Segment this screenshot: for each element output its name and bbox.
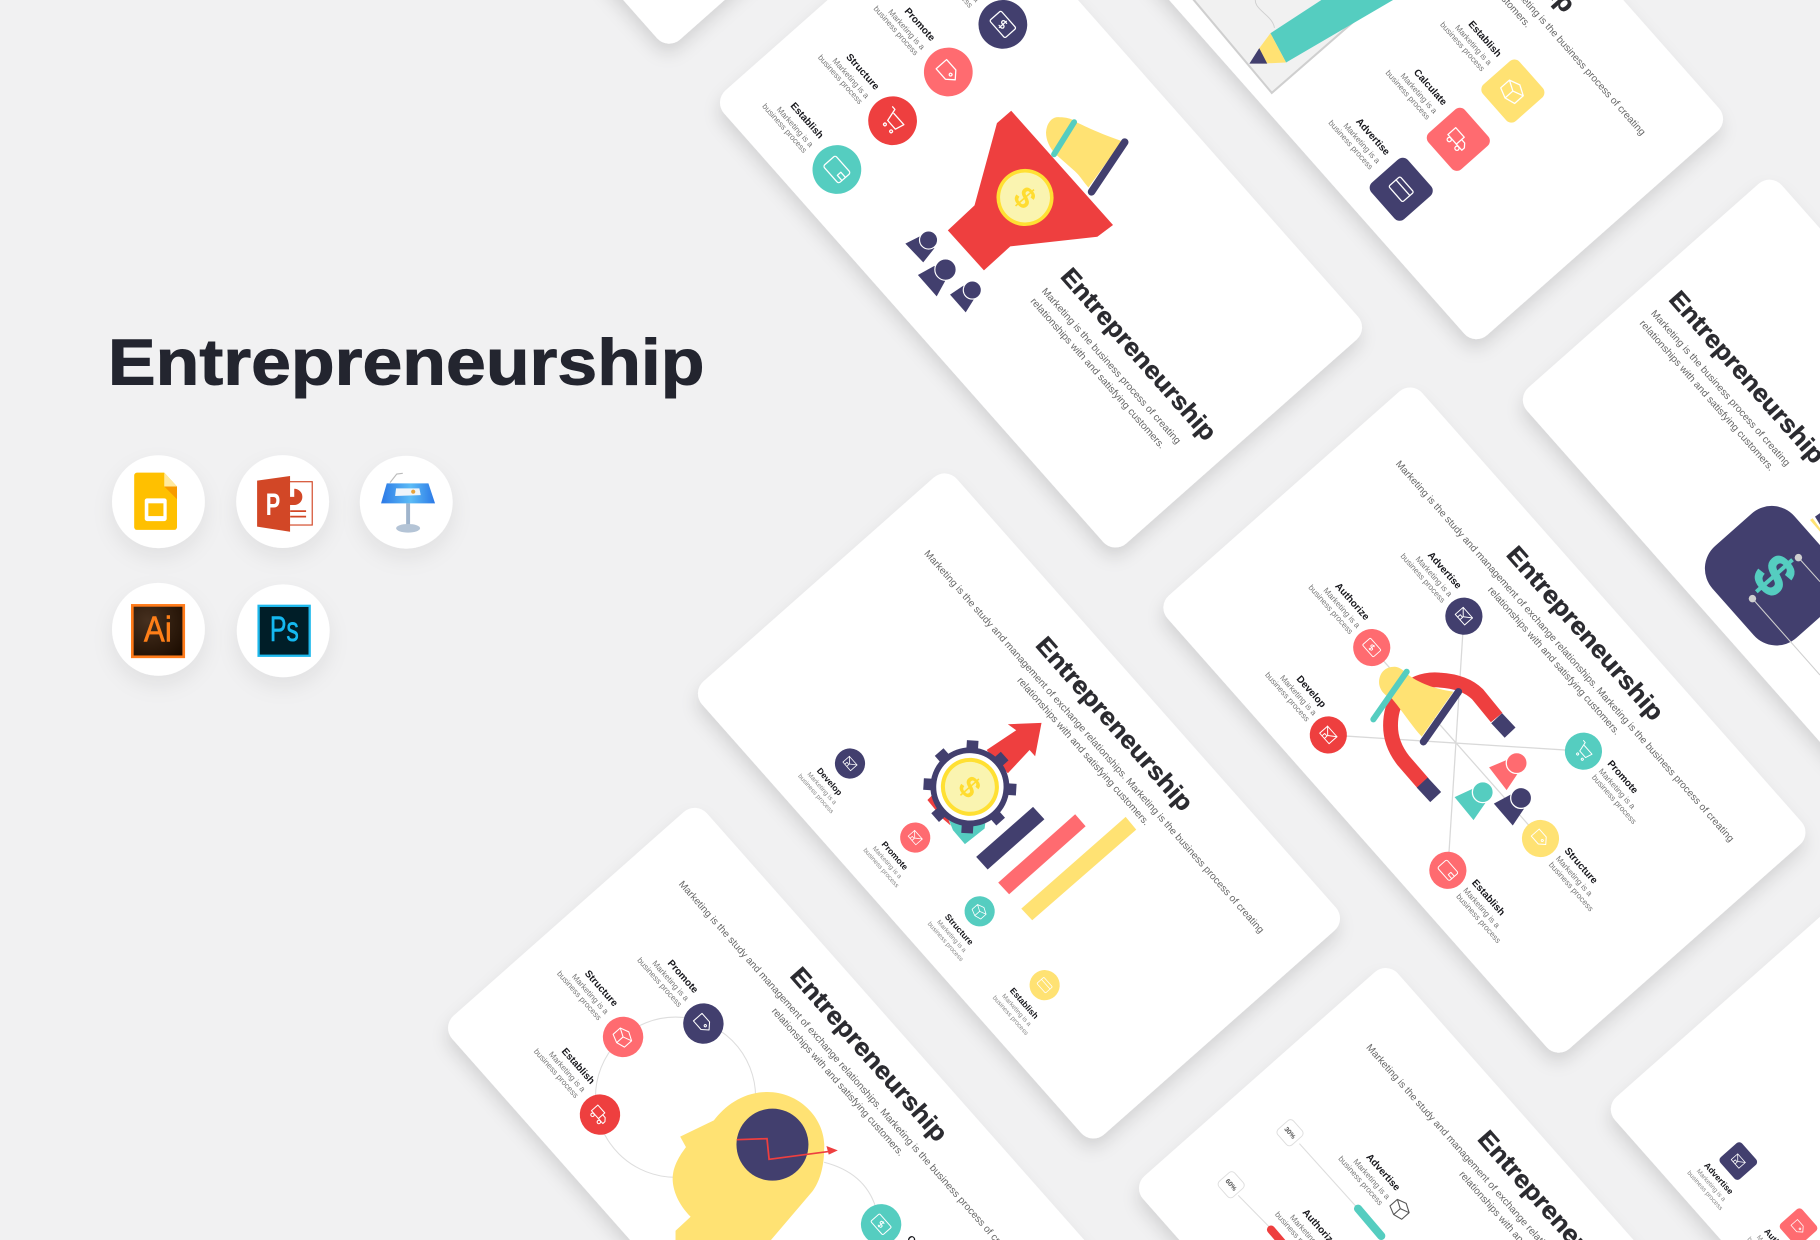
item: Promote: Promote xyxy=(665,958,700,996)
slide heading: relationships with and satisfying customers. xyxy=(1637,318,1776,473)
item: Advertise xyxy=(1392,537,1492,642)
panel: magnet slide xyxy=(1157,381,1812,1059)
gear: $ xyxy=(951,770,987,805)
item: Establish xyxy=(1422,844,1520,948)
coin: $ xyxy=(1006,181,1042,216)
item: Develop xyxy=(796,735,878,816)
item: Advertise: Advertise xyxy=(1364,1152,1402,1194)
item: Promote xyxy=(1557,725,1655,829)
item: Promote xyxy=(628,941,732,1052)
item: Structure: business process xyxy=(816,53,864,106)
item: Calculate: business process xyxy=(1384,69,1432,121)
item: Advertise: Marketing is a xyxy=(1351,1157,1392,1201)
item: Establish: Marketing is a xyxy=(775,105,815,149)
item: Calculate: Calculate xyxy=(1411,67,1449,108)
title: Entrepreneurship xyxy=(108,325,705,398)
people xyxy=(905,231,981,312)
item: Promote xyxy=(861,809,944,890)
slide heading: Entrepreneurship xyxy=(1501,541,1669,726)
megaphone xyxy=(1046,117,1125,192)
item: Advertise: Advertise xyxy=(1702,1160,1736,1196)
slide heading xyxy=(1637,285,1820,492)
panel: money slide xyxy=(1516,173,1820,851)
panel: cropped slide top left xyxy=(267,0,922,50)
item: Structure: Marketing is a xyxy=(831,56,871,101)
item: Structure: business process xyxy=(1547,860,1595,913)
item: Advertise xyxy=(1318,100,1436,224)
icon: Photoshop xyxy=(237,584,330,677)
slide heading: relationships with and satisfying customers. xyxy=(1485,585,1622,737)
item: Calculate xyxy=(1375,50,1493,174)
arrow behind gear xyxy=(927,790,951,826)
item: Promote: Marketing is a xyxy=(871,845,903,881)
progress line 30% xyxy=(1275,1118,1381,1236)
item: Develop: Develop xyxy=(1294,674,1328,710)
item: Structure: Marketing is a xyxy=(935,919,967,954)
item: Calculate: Marketing is a xyxy=(1399,72,1439,116)
magnet xyxy=(1391,680,1510,797)
item: Promote: Promote xyxy=(1605,759,1640,796)
slide heading: Marketing is the business process of creating xyxy=(1648,308,1792,469)
item: Advertise: Marketing is a xyxy=(1414,555,1454,599)
panel: head slide xyxy=(441,801,1097,1240)
coin xyxy=(985,157,1065,238)
progress line 60% xyxy=(1216,1170,1306,1240)
item: Structure: Structure xyxy=(943,912,976,947)
slide heading xyxy=(1028,262,1221,470)
icon: Keynote xyxy=(360,456,453,549)
item: Promote: Marketing is a xyxy=(1597,767,1637,811)
item: Authorize: Authorize xyxy=(1332,581,1371,623)
megaphone xyxy=(1373,667,1458,742)
brain circle xyxy=(736,1109,808,1181)
slide heading: Marketing is the business process of creating xyxy=(1039,286,1183,447)
progress line 60%: 60% xyxy=(1223,1178,1238,1193)
item: Promote: business process xyxy=(635,956,684,1009)
paper sheet xyxy=(1191,0,1364,93)
slide heading: Entrepreneurship xyxy=(1030,632,1198,817)
icon: box xyxy=(1388,1197,1412,1221)
item: Establish: Establish xyxy=(788,101,825,141)
item: Develop: business process xyxy=(796,773,835,816)
item: Authorize xyxy=(1746,1199,1820,1240)
panel: funnel slide xyxy=(713,0,1369,554)
slide heading: relationships with and satisfying customers. xyxy=(1015,676,1151,828)
item: Establish: business process xyxy=(1454,892,1503,945)
item: Establish: business process xyxy=(991,995,1030,1037)
gear xyxy=(904,721,1035,852)
item: Establish: Marketing is a xyxy=(1461,886,1502,930)
panel: diamond slide xyxy=(1604,882,1820,1240)
item: Calculate xyxy=(853,1196,956,1240)
item: Structure xyxy=(1514,812,1613,917)
item: Promote: business process xyxy=(861,847,900,890)
item: Establish: Establish xyxy=(1469,878,1507,918)
connector lines xyxy=(1328,616,1583,870)
item: Advertise xyxy=(1685,1133,1766,1213)
item: Promote: business process xyxy=(1590,773,1638,826)
item: Structure: Structure xyxy=(843,52,881,93)
slide heading: Entrepreneurship xyxy=(1055,263,1221,446)
item: Authorize xyxy=(1273,1195,1339,1240)
icon: PowerPoint: P xyxy=(266,487,280,522)
ring connector xyxy=(595,1017,756,1177)
item: Promote: business process xyxy=(872,4,920,57)
slide heading: Entrepreneurship xyxy=(784,962,952,1147)
item: Establish xyxy=(991,956,1073,1037)
head xyxy=(673,1092,824,1240)
item: Establish: business process xyxy=(1438,20,1486,73)
icon: Google Slides xyxy=(112,455,205,548)
item: Promote: Promote xyxy=(902,6,937,44)
icon: Photoshop: Ps xyxy=(270,610,299,649)
money bag: $ xyxy=(1739,542,1810,609)
item: Promote xyxy=(866,0,983,106)
item: Promote: Promote xyxy=(880,839,910,872)
panel: progress slide xyxy=(1132,961,1788,1240)
item: Establish: business process xyxy=(532,1047,580,1100)
item: Advertise: Marketing is a xyxy=(1342,121,1382,166)
progress line 30%: 30% xyxy=(1282,1126,1296,1141)
item: Promote: Marketing is a xyxy=(886,8,927,52)
icon: PowerPoint xyxy=(236,455,329,548)
item: Establish: Marketing is a xyxy=(547,1050,587,1094)
item: Structure: business process xyxy=(926,921,965,964)
item: Establish: Establish xyxy=(1466,19,1503,60)
growth arrow xyxy=(987,723,1042,773)
item: Structure xyxy=(810,32,927,155)
item: Advertise: business process xyxy=(1685,1170,1724,1213)
money bag xyxy=(1692,493,1820,675)
item: Advertise: Advertise xyxy=(1353,116,1392,158)
funnel xyxy=(948,111,1113,270)
item: Structure: Structure xyxy=(1562,846,1600,887)
item: Establish: Establish xyxy=(559,1046,597,1087)
item: Establish: Marketing is a xyxy=(1453,23,1494,67)
slide heading: Entrepreneurship xyxy=(1663,286,1820,469)
icon: Illustrator: Ai xyxy=(144,609,172,650)
item: Authorize: Marketing is a xyxy=(1322,586,1362,630)
item: Promote: Marketing is a xyxy=(650,959,691,1003)
item: Develop: Marketing is a xyxy=(806,771,838,806)
item: Advertise xyxy=(920,0,1037,59)
pencil xyxy=(1249,0,1399,64)
slide heading: relationships with and satisfying customers. xyxy=(769,1006,906,1159)
item: Authorize xyxy=(1300,569,1400,674)
item: Establish: Marketing is a xyxy=(1000,993,1032,1028)
item: Develop: Marketing is a xyxy=(1278,673,1319,718)
item: Advertise: Advertise xyxy=(1425,550,1464,592)
item: Establish: Establish xyxy=(1008,986,1041,1021)
panel: pencil slide xyxy=(1074,0,1730,346)
item: Structure xyxy=(547,955,652,1065)
item: Advertise: business process xyxy=(1326,118,1375,171)
item: Develop: business process xyxy=(1263,670,1311,723)
item: Establish: business process xyxy=(760,102,808,155)
item: Structure: Marketing is a xyxy=(570,972,611,1016)
item: Advertise: business process xyxy=(1399,552,1447,605)
item: Establish xyxy=(524,1032,629,1143)
item: Structure: Marketing is a xyxy=(1554,854,1594,898)
item: Develop xyxy=(1257,656,1356,761)
item: Authorize: business process xyxy=(1306,583,1355,636)
item: Establish xyxy=(1430,1,1547,125)
item: Establish xyxy=(754,81,871,204)
panel: gear slide xyxy=(691,467,1347,1145)
slide heading: relationships with and satisfying customers. xyxy=(1028,296,1167,451)
item: Structure xyxy=(926,882,1008,964)
icon: Illustrator xyxy=(112,583,205,676)
item: Advertise xyxy=(1336,1139,1402,1208)
red trend arrow xyxy=(737,1139,838,1159)
item: Structure: business process xyxy=(555,969,603,1022)
people xyxy=(1455,753,1532,826)
item: Develop: Develop xyxy=(815,766,844,797)
item: Structure: Structure xyxy=(582,968,620,1009)
slide heading: Marketing is the study and management of exchange relationships. Marketing is the business process of creating xyxy=(1393,459,1736,844)
item: Advertise: business process xyxy=(1336,1154,1385,1207)
item: Advertise: Marketing is a xyxy=(1695,1168,1727,1203)
slide heading: Marketing is the study and management of exchange relationships. Marketing is the business process of creating xyxy=(922,549,1266,936)
bar chart xyxy=(976,807,1136,920)
